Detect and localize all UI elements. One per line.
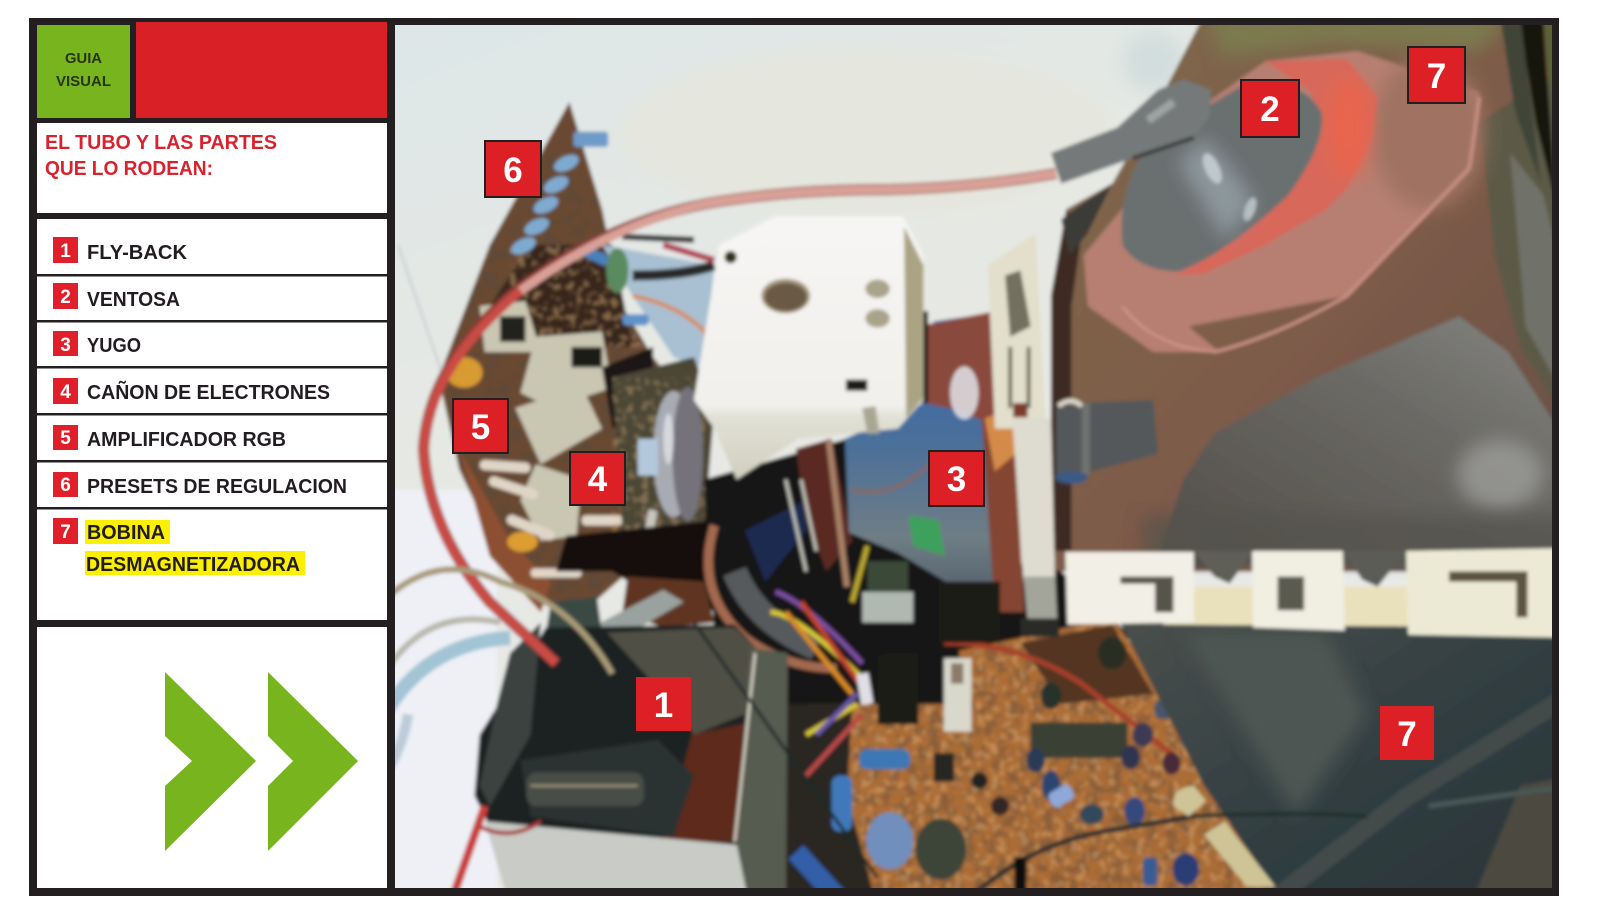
- legend item 4: CAÑON DE ELECTRONES: [87, 381, 330, 404]
- legend item 7: BOBINA: [87, 521, 165, 544]
- photo region: lower circuit board: [702, 508, 1276, 888]
- legend item 2: VENTOSA: [87, 288, 180, 311]
- photo region: electron gun and socket: [544, 356, 718, 632]
- legend item 3: YUGO: [87, 334, 141, 357]
- photo region: screen gray coating: [1143, 316, 1571, 571]
- legend item 4: 4: [60, 382, 71, 403]
- legend item 3: [53, 331, 141, 357]
- callout 7: bobina, upper: [1408, 47, 1465, 103]
- legend item 5: 5: [60, 428, 71, 449]
- photo region: lower tube dark: [1118, 620, 1552, 888]
- legend item 6: PRESETS DE REGULACION: [87, 475, 347, 498]
- photo: open CRT television interior: [378, 10, 1592, 913]
- heading: el tubo y las partes: EL TUBO Y LAS PARTES: [45, 132, 277, 154]
- heading: el tubo y las partes: [45, 132, 277, 180]
- callout 5: amplificador rgb: [453, 399, 508, 453]
- callout 2: ventosa: [1241, 80, 1299, 137]
- callout 6: presets de regulacion: [485, 141, 541, 197]
- photo region: neck board with amplifier: [429, 92, 714, 633]
- photo region: yoke wiring bundle: [770, 546, 867, 776]
- photo region: suction cup: [1051, 80, 1322, 271]
- callout 7: bobina, lower: [1380, 706, 1434, 760]
- photo region: white cover block: [694, 216, 923, 480]
- photo region: CRT funnel: [1051, 15, 1571, 571]
- photo region: green-grey component block: [862, 561, 913, 622]
- callout 4: cañon de electrones: [570, 452, 625, 505]
- legend item 5: AMPLIFICADOR RGB: [87, 428, 286, 451]
- callout 3: yugo: [929, 451, 984, 506]
- photo region: high-voltage red cable: [423, 173, 1056, 908]
- heading: el tubo y las partes: QUE LO RODEAN:: [45, 158, 213, 180]
- legend item 6: 6: [60, 475, 71, 496]
- legend item 1: [53, 237, 187, 264]
- callout 2: ventosa: 2: [1260, 90, 1280, 129]
- photo region: white plastic clips: [1065, 548, 1571, 638]
- legend item 1: FLY-BACK: [87, 241, 187, 264]
- callout 1: fly-back: [636, 677, 691, 731]
- photo region: flyback housing: [474, 622, 878, 908]
- callout 5: amplificador rgb: 5: [471, 408, 490, 447]
- callout 4: cañon de electrones: 4: [588, 460, 608, 499]
- callout 7: bobina, lower: 7: [1397, 715, 1417, 754]
- panel: red header bar: [136, 22, 387, 118]
- legend item 2: 2: [60, 287, 71, 308]
- legend item 7: [53, 518, 305, 576]
- photo region: yoke with copper coil: [845, 311, 1024, 612]
- legend item 7: DESMAGNETIZADORA: [86, 553, 300, 576]
- callout 6: presets de regulacion: 6: [503, 151, 523, 190]
- panel: section badge "guia visual": [37, 25, 130, 118]
- legend item 7: 7: [60, 522, 71, 543]
- photo region: dark centre and deflection coil: [700, 436, 873, 676]
- photo region: beige and grey cables, lower left: [388, 569, 612, 770]
- legend item 3: 3: [60, 335, 71, 356]
- panel: numbered legend: [37, 237, 387, 576]
- panel: section badge "guia visual": VISUAL: [56, 73, 111, 90]
- legend item 1: 1: [60, 241, 71, 262]
- callout 7: bobina, upper: 7: [1427, 57, 1446, 96]
- callout 1: fly-back: 1: [654, 686, 673, 725]
- panel: section badge "guia visual": GUIA: [65, 50, 102, 67]
- legend item 2: [53, 283, 180, 311]
- callout 3: yugo: 3: [947, 460, 966, 499]
- photo region: yoke clamp and retaining ring: [939, 233, 1158, 643]
- icon: double green chevron arrow: [165, 672, 358, 851]
